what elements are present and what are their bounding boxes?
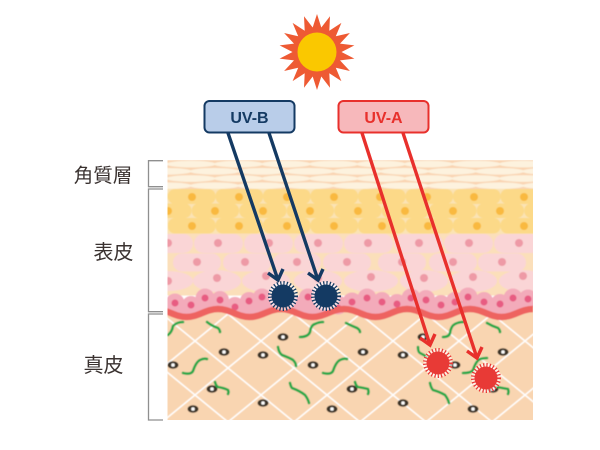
wavy basement membrane [155, 309, 533, 317]
damage burst: UV-B right [312, 282, 340, 310]
damage burst: UV-B left [268, 282, 298, 310]
label: stratum corneum: 角質層 [74, 165, 132, 187]
label box: UV-A: UV-A [364, 110, 403, 127]
bracket: stratum corneum [148, 161, 163, 187]
arrow: UV-B left [228, 133, 283, 280]
skin cross-section [168, 160, 533, 420]
label box: UV-A [338, 101, 428, 132]
label: epidermis: 表皮 [94, 241, 134, 264]
layer: pink spinous cells [143, 234, 547, 296]
layer: dermis [168, 306, 533, 420]
arrow: UV-A left [362, 133, 435, 345]
label box: UV-B: UV-B [230, 110, 269, 127]
bracket: epidermis [148, 189, 163, 312]
label: dermis: 真皮 [84, 354, 124, 377]
damage burst: UV-A upper [424, 348, 452, 378]
bracket: dermis [148, 314, 163, 420]
arrow: UV-B right [269, 133, 323, 280]
layer: stratum corneum [160, 160, 540, 189]
label box: UV-B [204, 101, 294, 132]
arrow: UV-A right [403, 133, 482, 358]
damage burst: UV-A lower [472, 364, 500, 392]
layer: yellow granular cells [160, 189, 548, 234]
icon: sun [280, 14, 354, 90]
green collagen fibers [168, 322, 508, 403]
layer: basal cells [155, 288, 538, 317]
fibroblast cells [168, 333, 508, 413]
